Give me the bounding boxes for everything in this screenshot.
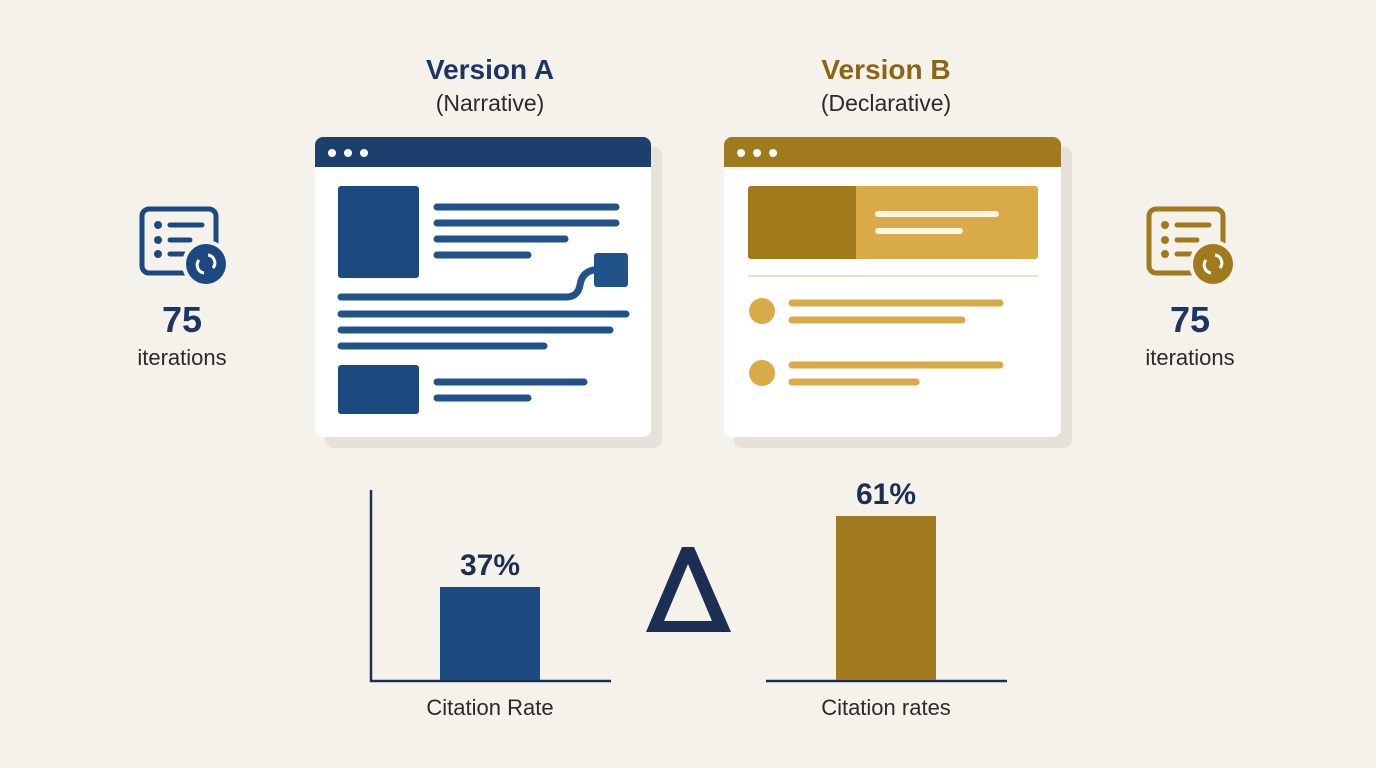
- title: Version B: Version B: [821, 54, 951, 85]
- panel: Version B browser: [724, 137, 1072, 448]
- text: 75 iterations B: 75: [1170, 299, 1210, 340]
- title: Version B: [821, 54, 951, 116]
- chart: Version A citation rate: Citation Rate: [426, 695, 554, 720]
- text: 75 iterations A: [137, 299, 227, 370]
- text: 75 iterations B: iterations: [1145, 345, 1235, 370]
- title: Version A: Version A: [426, 54, 554, 85]
- title: Version A: [426, 54, 554, 116]
- text: 75 iterations A: iterations: [137, 345, 227, 370]
- panel: Version A browser: [315, 137, 662, 448]
- title: Version A: (Narrative): [436, 90, 544, 116]
- chart: Version A citation rate: [370, 490, 611, 720]
- chart: Version B citation rates: [766, 478, 1007, 720]
- title: Version B: (Declarative): [821, 90, 951, 116]
- chart: Version B citation rates: 61%: [856, 478, 916, 511]
- text: 75 iterations B: [1145, 299, 1235, 370]
- icon: delta: [646, 547, 731, 632]
- icon: iterations B: [1149, 209, 1237, 288]
- chart: Version B citation rates: Citation rates: [821, 695, 951, 720]
- icon: iterations A: [142, 209, 230, 288]
- text: 75 iterations A: 75: [162, 299, 202, 340]
- chart: Version A citation rate: 37%: [460, 549, 520, 582]
